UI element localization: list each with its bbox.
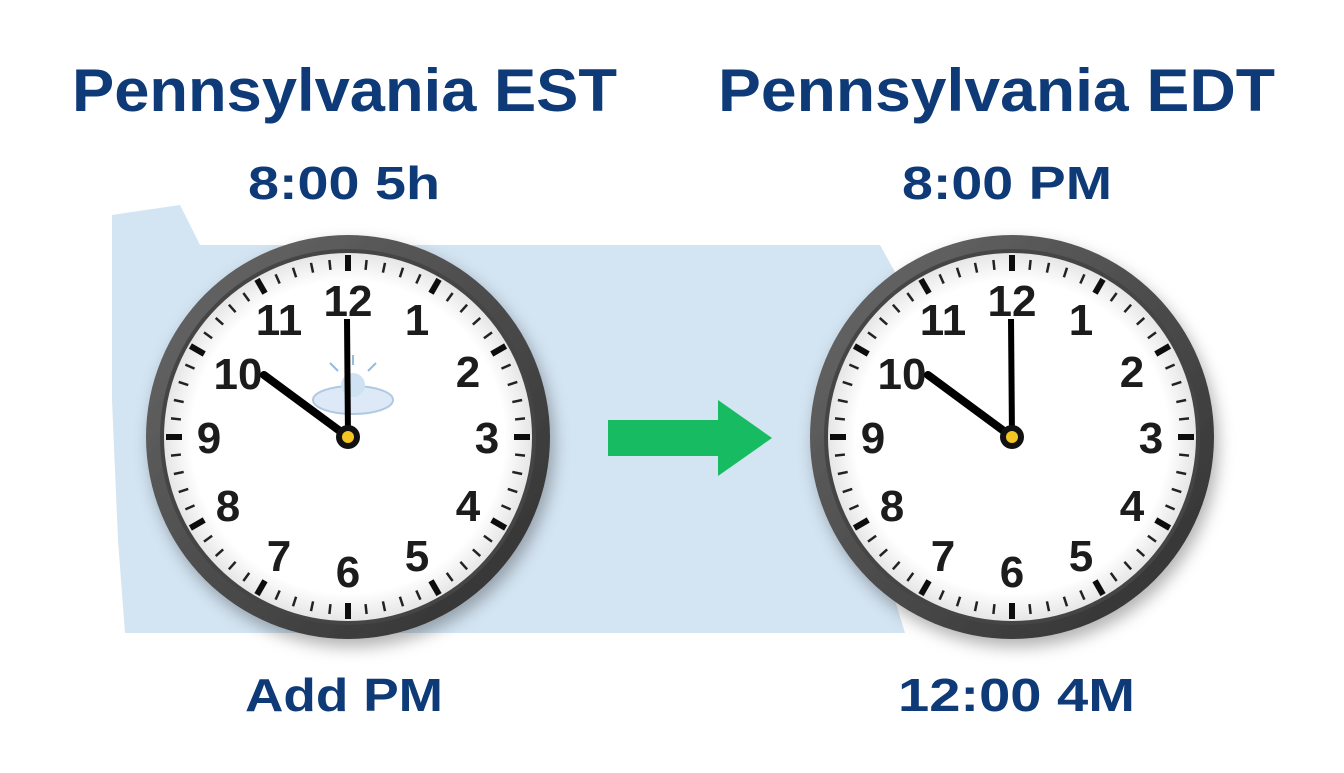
subtitle right: 8:00 PM — [902, 157, 1112, 209]
title: Pennsylvania EDT: Pennsylvania EDT — [718, 57, 1275, 124]
bottom label left: Add PM — [245, 669, 443, 721]
title: Pennsylvania EST: Pennsylvania EST — [72, 57, 617, 124]
bottom label right: 12:00 4M — [898, 669, 1135, 721]
subtitle left: 8:00 5h — [248, 157, 440, 209]
map: Pennsylvania — [112, 205, 905, 633]
clock right — [810, 235, 1214, 639]
icon: sun cloud — [313, 355, 393, 414]
arrow — [608, 400, 772, 476]
clock left — [146, 235, 550, 639]
